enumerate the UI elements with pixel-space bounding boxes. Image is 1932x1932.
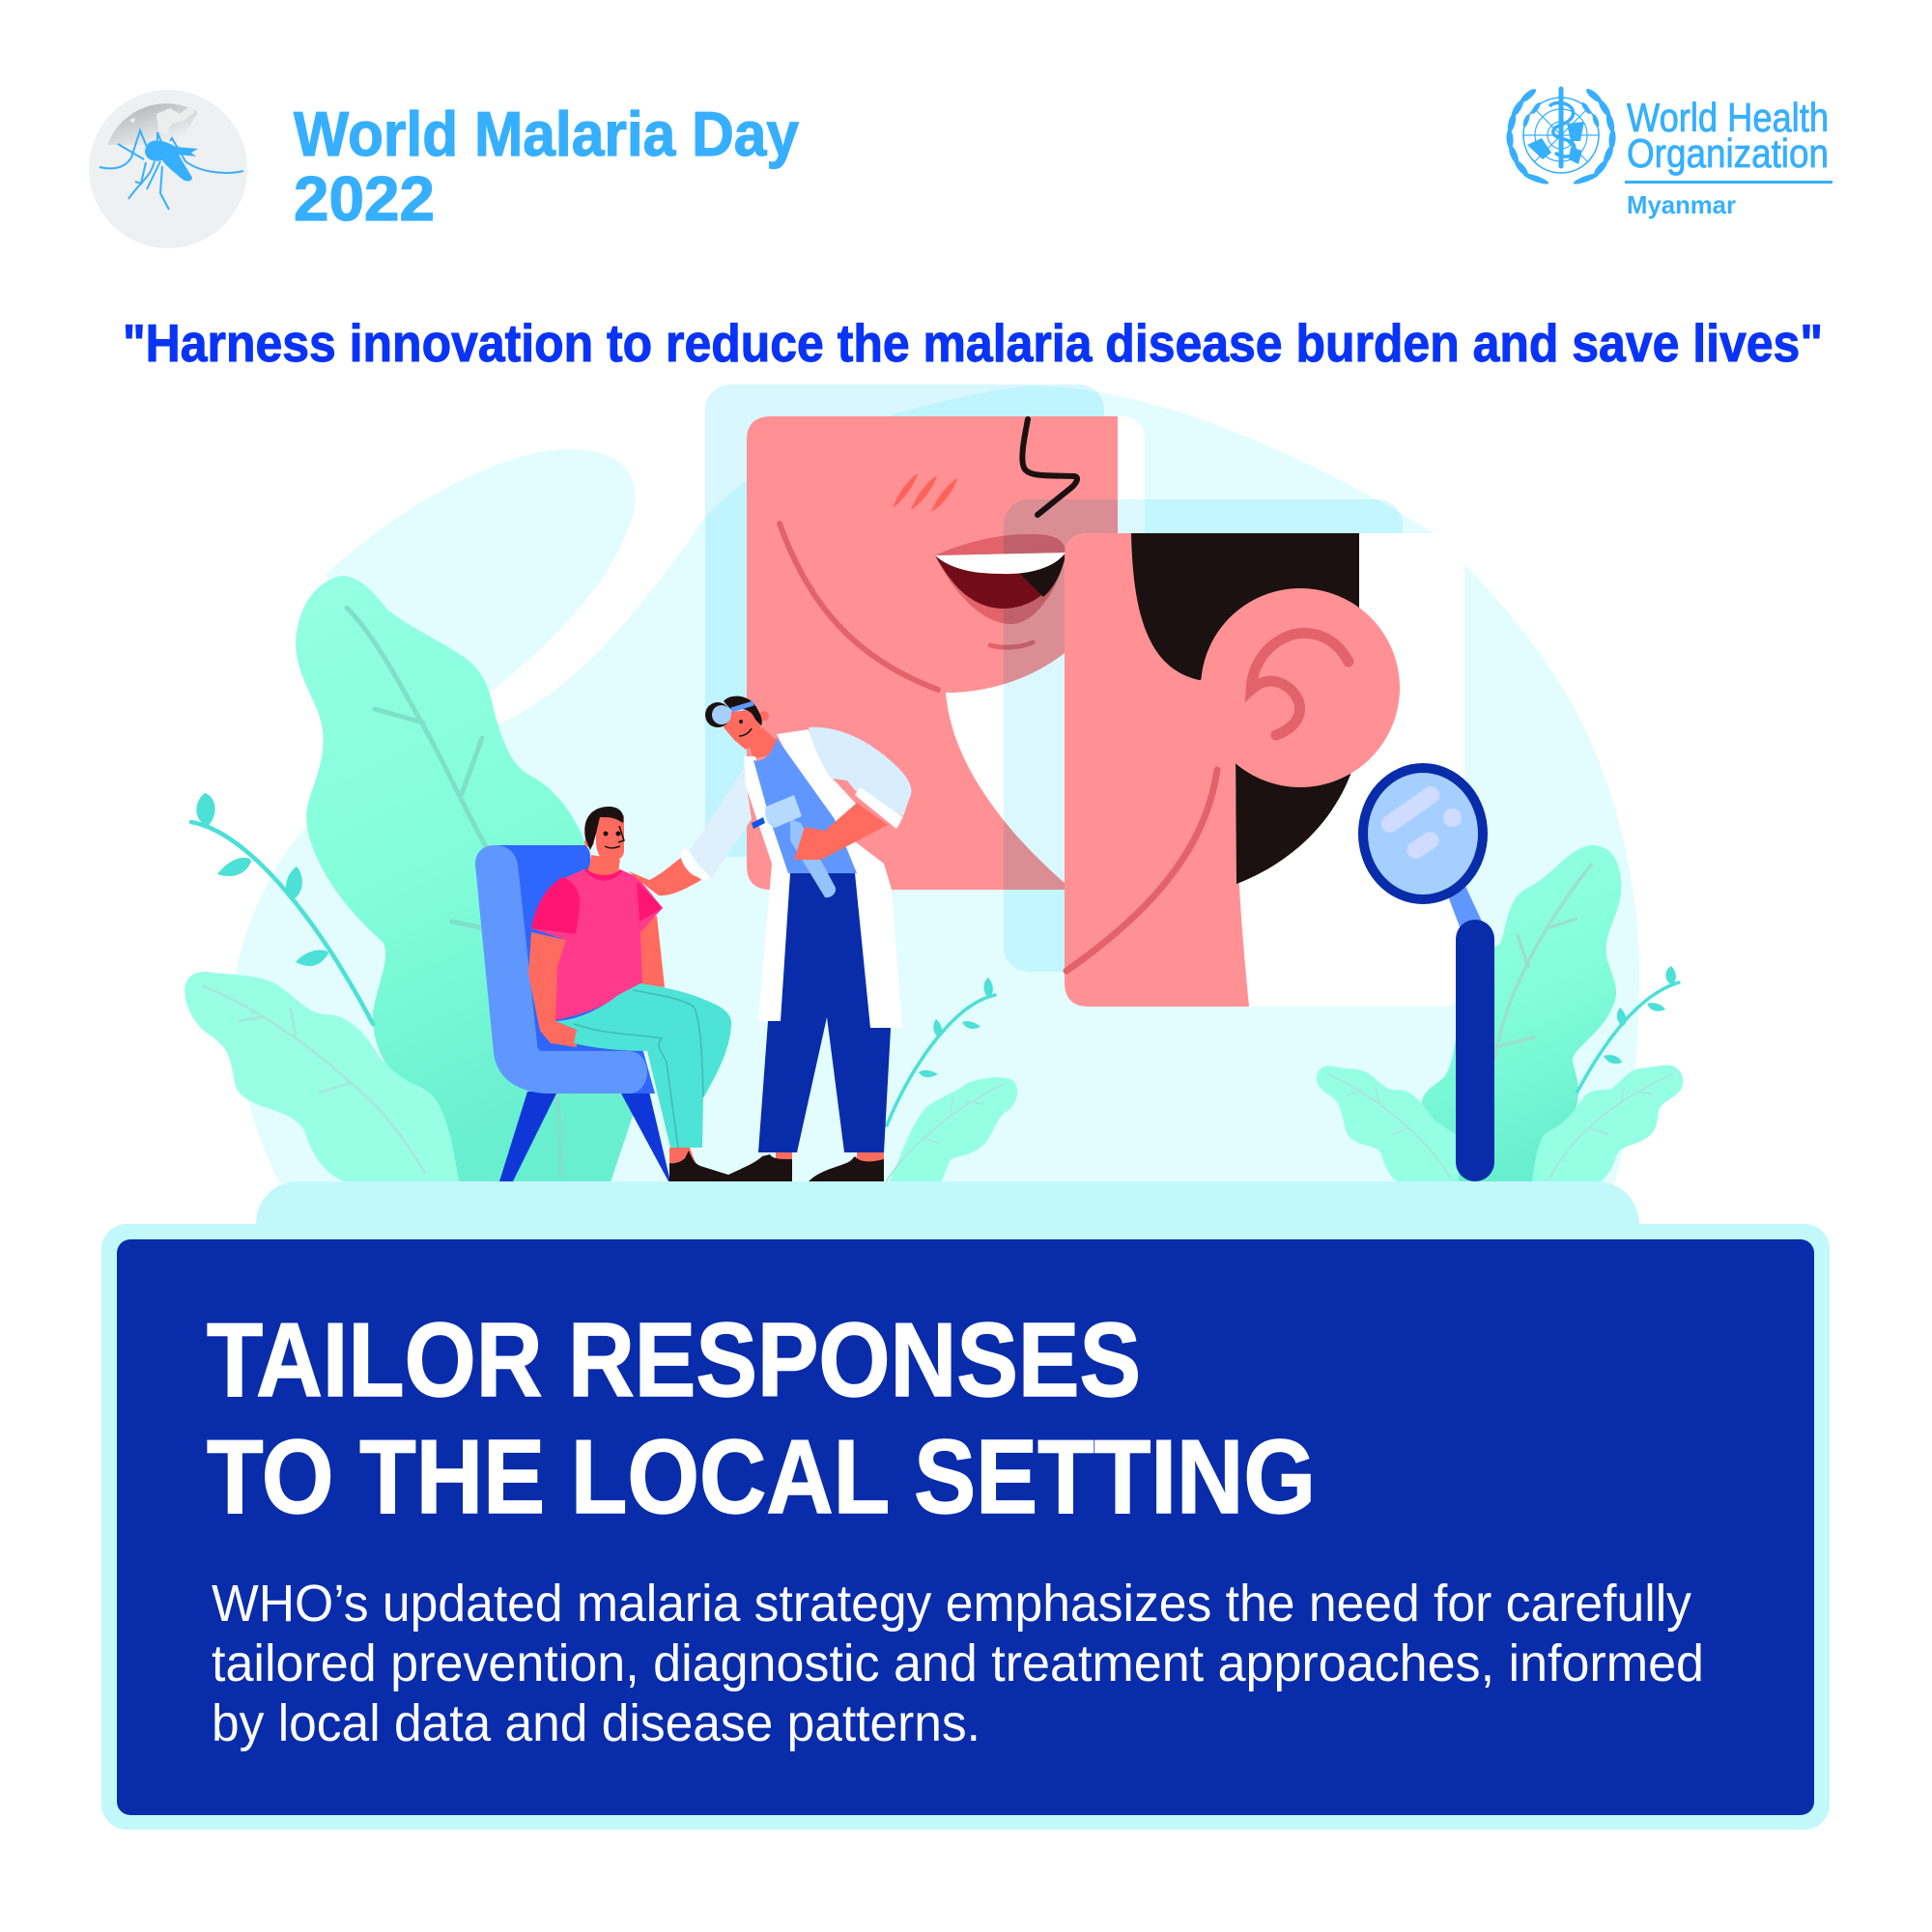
hair [1131, 533, 1359, 884]
face skin [747, 416, 1118, 890]
jaw line [780, 524, 938, 690]
right plants behind mirror [1317, 845, 1683, 1188]
nose line [1022, 419, 1077, 515]
heading: TO THE LOCAL SETTING [207, 1418, 1316, 1536]
doctor coat [744, 729, 902, 1028]
cheek blush [893, 473, 957, 512]
patient arm far [640, 916, 665, 987]
doctor arm left sleeve [689, 768, 752, 879]
body text: tailored prevention, diagnostic and treatment approaches, informed [212, 1634, 1704, 1692]
chin crease [990, 642, 1033, 647]
icon: WHO emblem [1506, 87, 1616, 186]
doctor upper sleeve [809, 727, 911, 816]
body text: by local data and disease patterns. [212, 1694, 980, 1752]
chair legs [499, 1092, 670, 1181]
ground strip [256, 1181, 1639, 1225]
sprig [1577, 982, 1679, 1092]
patient arm near [528, 932, 577, 1047]
logo: World Health Organization Myanmar: Organization [1627, 130, 1829, 176]
icon: mosquito on globe [89, 90, 247, 248]
patient shirt [531, 868, 663, 1020]
large leaf [296, 576, 638, 1188]
logo: World Health Organization Myanmar [1506, 87, 1833, 219]
mirror handle [1456, 920, 1494, 1181]
doctor shirt [753, 738, 857, 873]
doctor cuff [855, 787, 903, 829]
patient in chair [475, 807, 731, 1181]
doctor [629, 696, 911, 1181]
panel: ear close-up [1065, 533, 1464, 1007]
title: World Malaria Day 2022: World Malaria Day [294, 99, 799, 169]
panel: white backing of mouth close-up [773, 416, 1145, 890]
patient trousers [555, 983, 731, 1148]
sprig [191, 822, 373, 1024]
ear [1201, 588, 1400, 787]
sprig [887, 995, 995, 1125]
right small leaf [1531, 1065, 1683, 1188]
patient head [580, 855, 623, 884]
chair back dark [497, 845, 655, 1094]
patient shoe [669, 1148, 696, 1163]
mirror stem [1447, 884, 1484, 929]
title: World Malaria Day 2022: 2022 [294, 163, 435, 234]
doctor head [724, 709, 761, 750]
doctor shoes [716, 1154, 884, 1181]
neck and cheek skin [1065, 533, 1256, 1007]
left plants [185, 576, 638, 1188]
doctor forearm [794, 803, 888, 860]
title: World Malaria Day 2022 [294, 99, 799, 234]
neck line [1066, 770, 1217, 971]
mouth interior and teeth [935, 553, 1065, 609]
doctor neck [749, 727, 779, 758]
chair body light [475, 845, 647, 1094]
doctor ankles [776, 1152, 884, 1164]
back frame of mouth panel [705, 384, 1104, 857]
reflex hammer [752, 795, 836, 897]
large leaf [1422, 845, 1621, 1188]
logo: World Health Organization Myanmar: Myanmar [1627, 190, 1736, 219]
body text [212, 1575, 1704, 1752]
mirror lens [1363, 768, 1483, 899]
heading [207, 1301, 1316, 1536]
doctor hand on patient [629, 858, 701, 895]
left small leaf [1317, 1065, 1459, 1188]
heading: TAILOR RESPONSES [207, 1301, 1141, 1419]
logo: World Health Organization Myanmar: World Health [1627, 95, 1829, 140]
dental mirror [1363, 768, 1494, 1181]
body text: WHO’s updated malaria strategy emphasizes the need for carefully [212, 1575, 1691, 1633]
small plant by doctor [887, 978, 1017, 1181]
doctor trousers [758, 873, 891, 1152]
panel: message box [101, 1224, 1830, 1830]
background dome [235, 385, 1639, 1188]
lips [935, 534, 1065, 624]
small leaf [185, 972, 460, 1188]
panel: mouth close-up [747, 416, 1118, 890]
front frame overlay [1004, 499, 1403, 972]
